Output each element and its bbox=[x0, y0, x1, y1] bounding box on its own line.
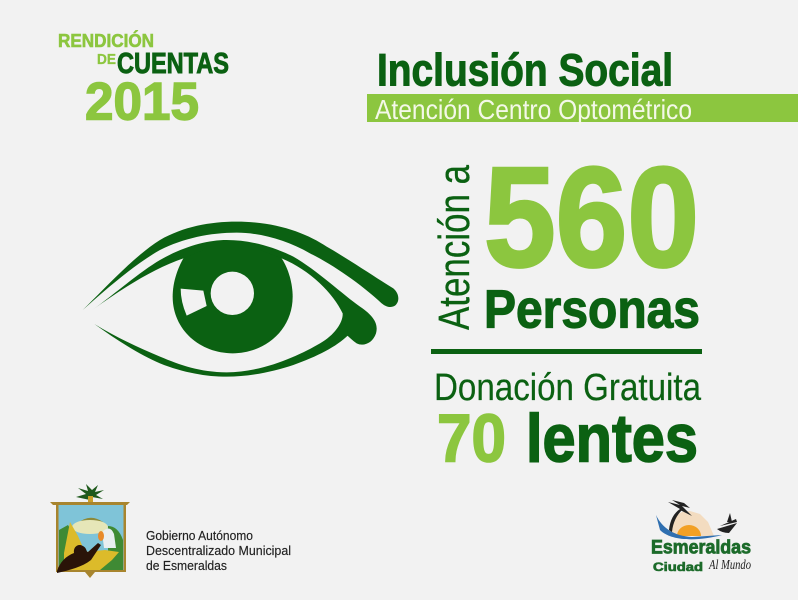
logo: Rendición de Cuentas 2015: CUENTAS bbox=[117, 48, 229, 80]
shield field bbox=[56, 505, 126, 578]
iris bbox=[173, 250, 293, 353]
iris highlight bbox=[181, 289, 207, 316]
shield crossbar bbox=[50, 502, 130, 505]
stat: 560: 560 bbox=[484, 138, 699, 297]
stat: Atención a, vertical: Atención a bbox=[430, 165, 479, 330]
boat bbox=[717, 513, 737, 533]
text: institution name: Gobierno Autónomo bbox=[146, 529, 253, 543]
stat: lentes: lentes bbox=[526, 400, 698, 476]
icon: municipal coat of arms bbox=[50, 484, 130, 578]
Ciudad wordmark: Ciudad bbox=[653, 562, 703, 574]
stat: Personas: Personas bbox=[484, 280, 700, 340]
logo: Rendición de Cuentas 2015 bbox=[58, 30, 229, 132]
logo: Rendición de Cuentas 2015: 2015 bbox=[85, 72, 199, 132]
upper lid bbox=[92, 240, 377, 345]
text: Donación Gratuita: Donación Gratuita bbox=[434, 367, 702, 409]
sun rays bbox=[668, 511, 714, 536]
Esmeraldas wordmark: Esmeraldas bbox=[651, 538, 751, 558]
palm tree bbox=[668, 500, 692, 532]
pupil bbox=[211, 272, 254, 315]
icon: eye bbox=[83, 222, 398, 377]
text: institution name: Descentralizado Municipal bbox=[146, 544, 291, 558]
logo: Esmeraldas Ciudad Al Mundo bbox=[651, 500, 751, 574]
stat: 70: 70 bbox=[437, 400, 506, 476]
palm crown bbox=[76, 484, 104, 512]
heading: Inclusión Social: Inclusión Social bbox=[377, 44, 673, 96]
silhouette figure bbox=[57, 543, 101, 573]
text: institution name bbox=[146, 529, 291, 573]
sun bbox=[677, 525, 701, 536]
eyebrow stroke bbox=[83, 222, 398, 310]
logo: Rendición de Cuentas 2015: RENDICIÓN bbox=[58, 30, 154, 51]
text: institution name: de Esmeraldas bbox=[146, 559, 227, 573]
logo: Rendición de Cuentas 2015: DE bbox=[97, 51, 116, 68]
subheading banner: Atención Centro Optométrico bbox=[375, 94, 692, 125]
lower lid bbox=[94, 313, 348, 377]
divider bar bbox=[431, 349, 702, 354]
wave bbox=[656, 515, 722, 539]
Al Mundo script: Al Mundo bbox=[708, 558, 751, 573]
